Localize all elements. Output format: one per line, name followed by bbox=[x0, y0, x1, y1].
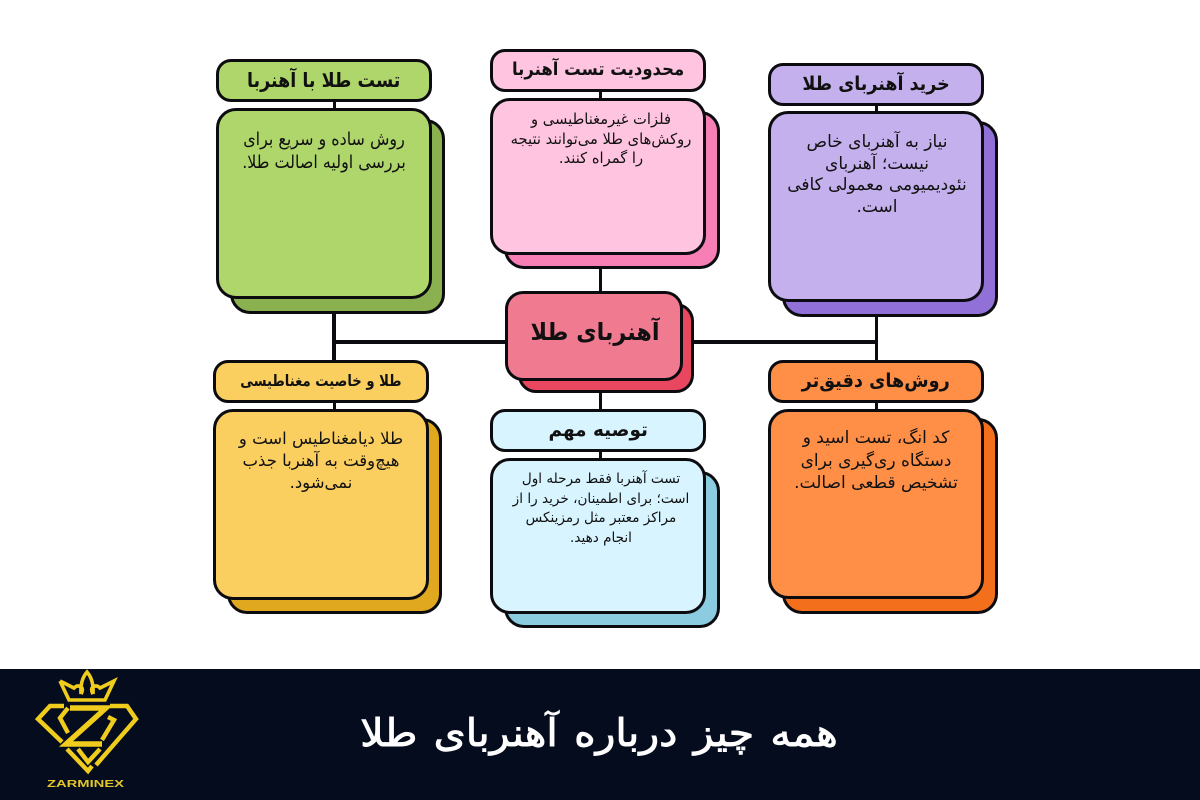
panel: test limits bbox=[490, 49, 720, 269]
text: important advice bbox=[512, 470, 689, 546]
heading: test limits: محدودیت تست آهنربا bbox=[512, 59, 684, 80]
text: gold and magnetism bbox=[238, 429, 403, 492]
heading: gold magnet test: تست طلا با آهنربا bbox=[247, 68, 401, 92]
heading: gold and magnetism bbox=[213, 360, 429, 403]
heading: important advice bbox=[490, 409, 706, 452]
heading: central title: آهنربای طلا bbox=[530, 318, 660, 346]
text: test limits bbox=[511, 110, 691, 167]
text: gold magnet test: بررسی اولیه اصالت طلا. bbox=[242, 152, 406, 173]
footer band bbox=[0, 669, 1200, 800]
text: buying a magnet: نیاز به آهنربای خاص bbox=[807, 132, 947, 152]
icon: zarminex logo bbox=[35, 669, 139, 790]
text: test limits: فلزات غیرمغناطیسی و bbox=[531, 110, 671, 128]
text: gold and magnetism: نمی‌شود. bbox=[290, 473, 352, 492]
text: more accurate methods: تشخیص قطعی اصالت. bbox=[794, 473, 958, 493]
icon: diamond with Z bbox=[38, 706, 136, 771]
heading: buying a magnet: خرید آهنربای طلا bbox=[802, 73, 950, 95]
heading: more accurate methods: روش‌های دقیق‌تر bbox=[802, 370, 950, 392]
text: gold and magnetism: طلا دیامغناطیس است و bbox=[239, 429, 403, 448]
heading: gold magnet test bbox=[216, 59, 432, 102]
text: gold magnet test: روش ساده و سریع برای bbox=[243, 129, 405, 150]
panel: gold and magnetism bbox=[213, 360, 442, 614]
panel: more accurate methods bbox=[768, 360, 998, 614]
heading: more accurate methods bbox=[768, 360, 984, 403]
text: important advice: انجام دهید. bbox=[570, 530, 632, 546]
text: test limits: را گمراه کنند. bbox=[559, 149, 643, 167]
connector lines bbox=[332, 269, 878, 409]
text: more accurate methods: کد انگ، تست اسید و bbox=[803, 428, 949, 448]
text: test limits: روکش‌های طلا می‌توانند نتیجه bbox=[511, 130, 691, 148]
text: important advice: است؛ برای اطمینان، خرید را از bbox=[513, 490, 689, 506]
text: buying a magnet bbox=[787, 131, 967, 216]
text: gold magnet test bbox=[242, 129, 406, 173]
text: important advice: تست آهنربا فقط مرحله اول bbox=[522, 471, 680, 487]
heading: gold and magnetism: طلا و خاصیت مغناطیسی bbox=[240, 372, 402, 390]
central node: gold magnet bbox=[505, 291, 694, 393]
panel: gold magnet test bbox=[216, 59, 445, 314]
text: important advice: مراکز معتبر مثل رمزینکس bbox=[526, 510, 676, 526]
heading: buying a magnet bbox=[768, 63, 984, 106]
text: more accurate methods: دستگاه ری‌گیری برای bbox=[801, 450, 951, 470]
footer title: همه چیز درباره آهنربای طلا bbox=[360, 711, 838, 755]
logo wordmark: ZARMINEX bbox=[47, 779, 124, 790]
panel: important advice bbox=[490, 409, 720, 628]
text: more accurate methods bbox=[794, 428, 958, 493]
text: buying a magnet: نئودیمیومی معمولی کافی bbox=[787, 175, 967, 195]
heading: test limits bbox=[490, 49, 706, 92]
text: buying a magnet: است. bbox=[856, 196, 898, 216]
text: gold and magnetism: هیچ‌وقت به آهنربا جذب bbox=[243, 451, 399, 470]
panel: buying a magnet bbox=[768, 63, 998, 317]
heading: important advice: توصیه مهم bbox=[548, 419, 648, 441]
icon: crown bbox=[60, 672, 114, 700]
text: buying a magnet: نیست؛ آهنربای bbox=[825, 154, 929, 174]
